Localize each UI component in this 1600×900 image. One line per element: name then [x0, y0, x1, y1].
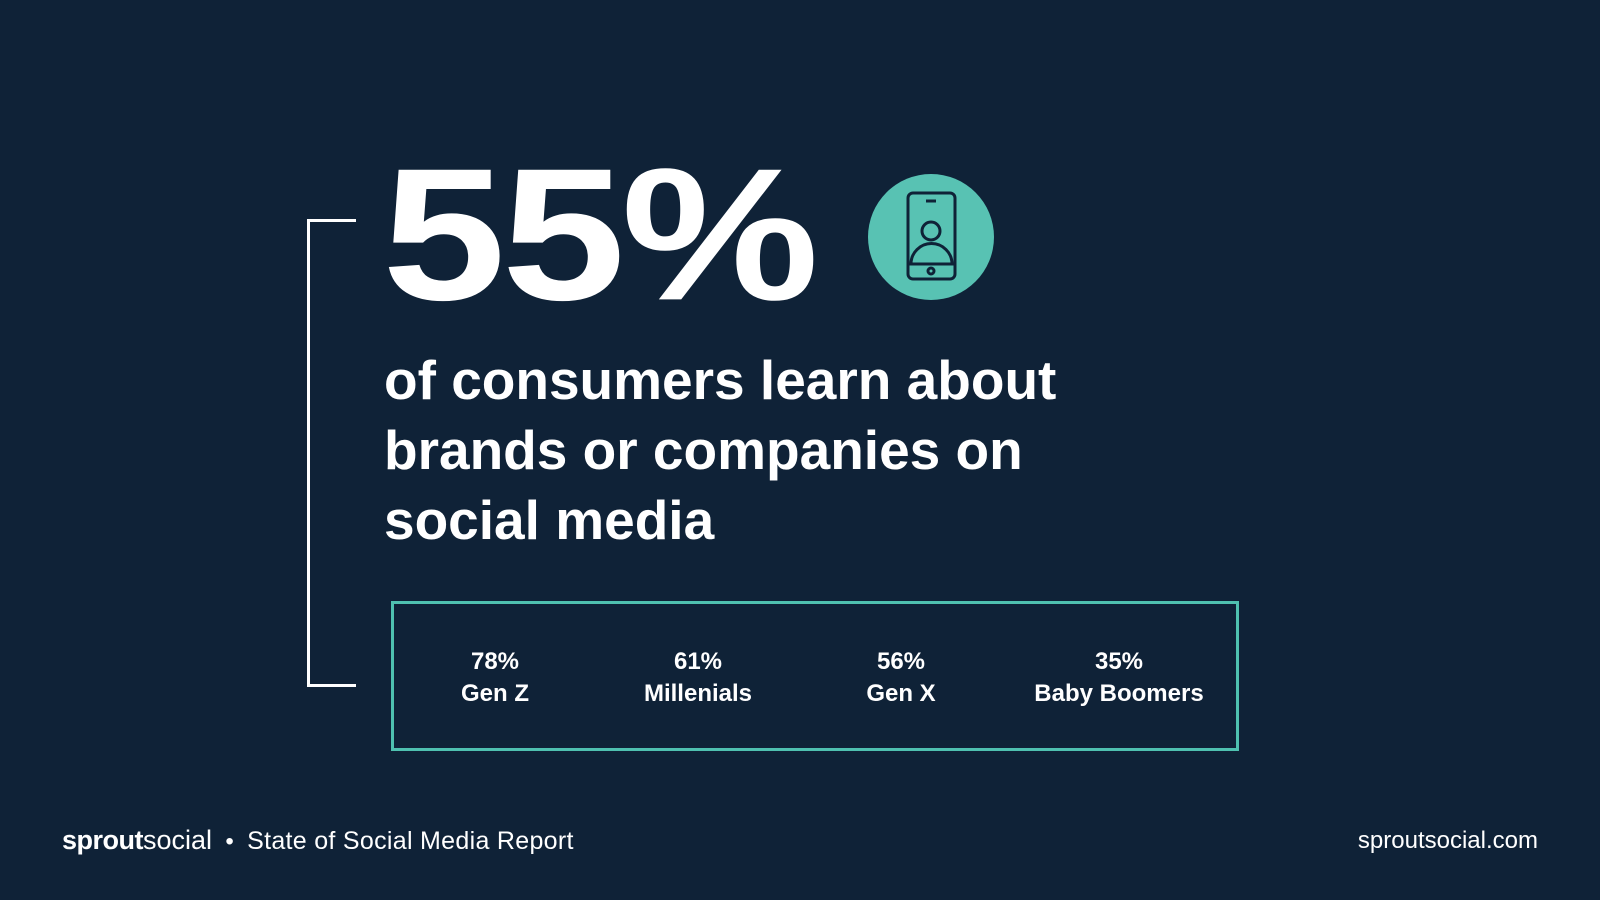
stat: Gen Z: 78%	[471, 648, 519, 675]
stat: Baby Boomers: 35%	[1095, 648, 1143, 675]
description text: social media	[384, 489, 714, 551]
stat: Baby Boomers	[1034, 648, 1204, 707]
stat: Gen Z: Gen Z	[461, 680, 529, 707]
bracket	[307, 219, 356, 687]
stat: Millenials: 61%	[674, 648, 722, 675]
icon: phone with person	[868, 174, 994, 300]
stat: Gen X: Gen X	[866, 680, 936, 707]
stat: Millenials	[644, 648, 752, 707]
headline stat: 55%	[382, 129, 815, 340]
stat: Gen Z	[461, 648, 529, 707]
description text	[384, 349, 1056, 551]
panel: generation breakdown	[391, 601, 1239, 751]
footer: brand and report: sproutsocial • State of Social Media Report	[62, 825, 574, 855]
stat: Gen X: 56%	[877, 648, 925, 675]
stat: Baby Boomers: Baby Boomers	[1034, 680, 1204, 707]
footer: website: sproutsocial.com	[1358, 827, 1538, 854]
description text: of consumers learn about	[384, 349, 1056, 411]
stat: Gen X	[866, 648, 936, 707]
stat: Millenials: Millenials	[644, 680, 752, 707]
description text: brands or companies on	[384, 419, 1023, 481]
